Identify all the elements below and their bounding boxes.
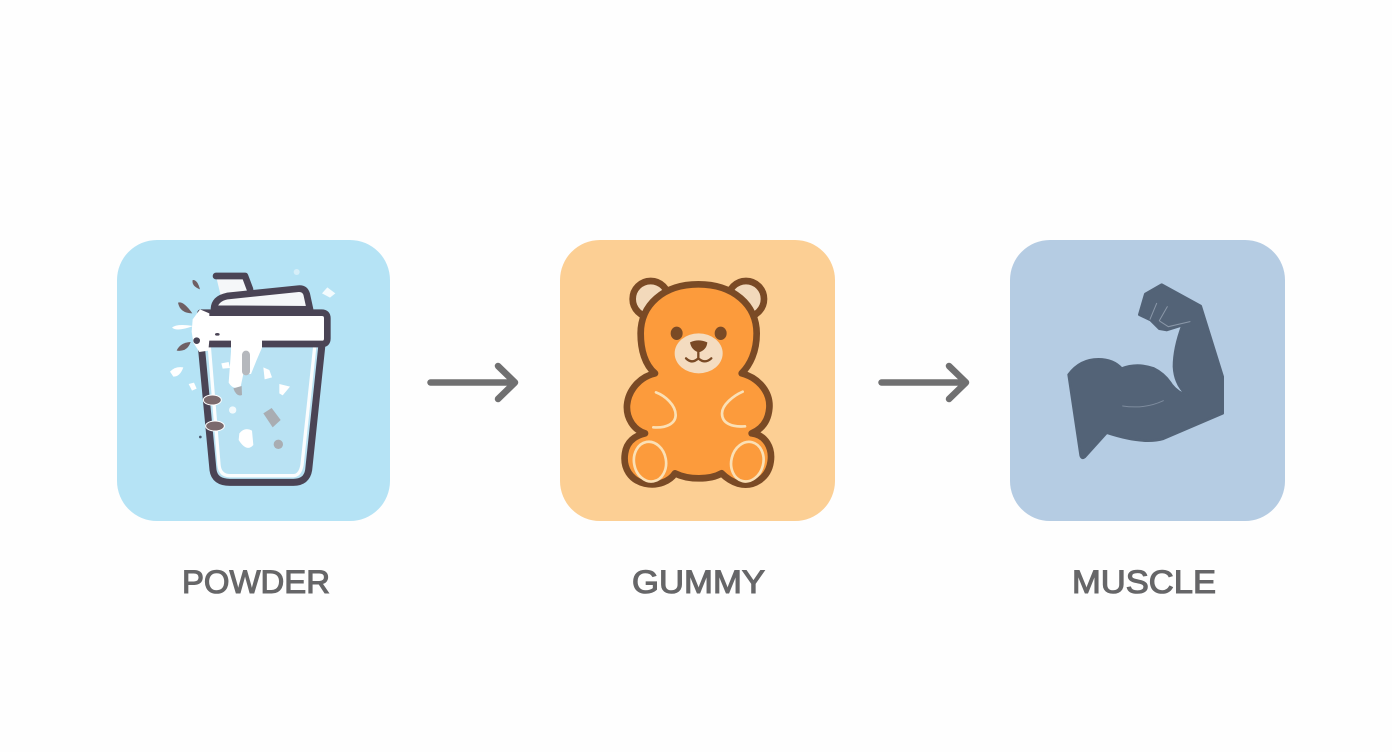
arrow: powder to gummy xyxy=(430,366,515,399)
card: powder background xyxy=(117,240,390,521)
icon: flexed arm xyxy=(1069,285,1223,458)
label: muscle: MUSCLE xyxy=(1072,564,1216,600)
label: powder: POWDER xyxy=(182,564,330,600)
panel: muscle xyxy=(1010,240,1285,521)
panel: powder xyxy=(117,240,390,521)
card: gummy background xyxy=(560,240,835,521)
card: muscle background xyxy=(1010,240,1285,521)
arrow: gummy to muscle xyxy=(882,366,966,399)
icon: gummy bear xyxy=(625,281,771,485)
label: gummy: GUMMY xyxy=(632,564,765,600)
icon: shaker cup xyxy=(170,269,335,483)
panel: gummy xyxy=(560,240,835,521)
